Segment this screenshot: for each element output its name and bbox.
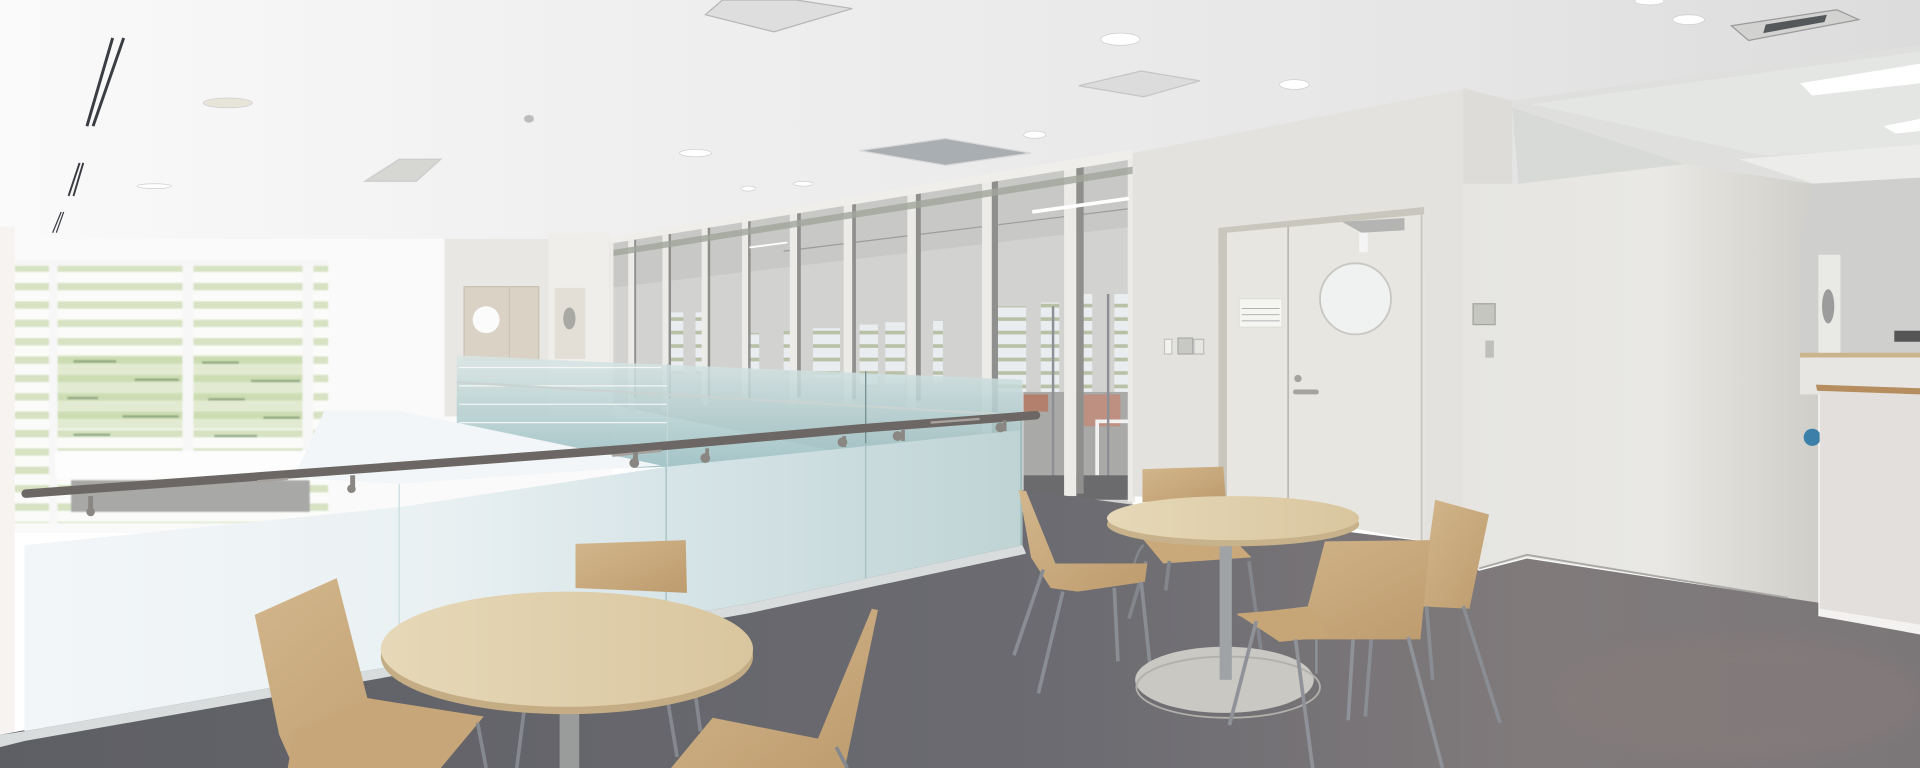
- floor light: [1555, 637, 1920, 759]
- wall base line: [1479, 555, 1788, 598]
- window with louvers: [15, 260, 328, 523]
- door handle: [1293, 375, 1319, 394]
- ceiling vents: [365, 0, 1859, 181]
- wall controls: [1473, 304, 1495, 358]
- door closer: [1342, 218, 1404, 252]
- upper right reflective panels: [1512, 45, 1920, 238]
- ceiling: [0, 0, 1920, 269]
- mullions: [610, 152, 1135, 502]
- room furniture through glass: [1024, 294, 1131, 500]
- chair right side: [1365, 500, 1500, 723]
- clear glass balustrade: [457, 355, 1022, 490]
- frosted glass balustrade: [0, 416, 1026, 747]
- right room behind counter: [1800, 233, 1920, 446]
- left column: [0, 227, 15, 747]
- glass partition wall: [610, 149, 1135, 505]
- head rail: [610, 149, 1133, 244]
- ceiling downlights: [137, 0, 1704, 191]
- round table right: [1107, 496, 1359, 718]
- right partition wall with door: [1133, 88, 1467, 571]
- back wall with doors: [444, 233, 610, 416]
- right wall: [1463, 88, 1818, 603]
- mullion shadows: [634, 165, 1084, 494]
- round table front: [381, 592, 753, 768]
- door notice: [1239, 299, 1282, 327]
- floor: [0, 490, 1920, 768]
- ceiling diffuser: linear slot left: [53, 38, 124, 233]
- handrail: [26, 415, 1036, 516]
- chair front right: [1229, 540, 1442, 768]
- views through glass: [671, 294, 1129, 404]
- far door single: [555, 288, 585, 359]
- far door double: [464, 287, 539, 360]
- back table chair: [1129, 467, 1261, 652]
- chair front center: [671, 609, 878, 768]
- handrail brackets: [86, 420, 1007, 516]
- double door: [1218, 207, 1424, 541]
- wall switches: [1164, 338, 1204, 354]
- reception counter: [1816, 385, 1920, 634]
- white landing slab: [294, 410, 661, 484]
- chair front left: [255, 578, 486, 768]
- chair behind front table: [517, 540, 700, 768]
- round door window: [1320, 263, 1391, 334]
- left wall: [0, 239, 612, 533]
- chair left of round table: [1014, 490, 1153, 698]
